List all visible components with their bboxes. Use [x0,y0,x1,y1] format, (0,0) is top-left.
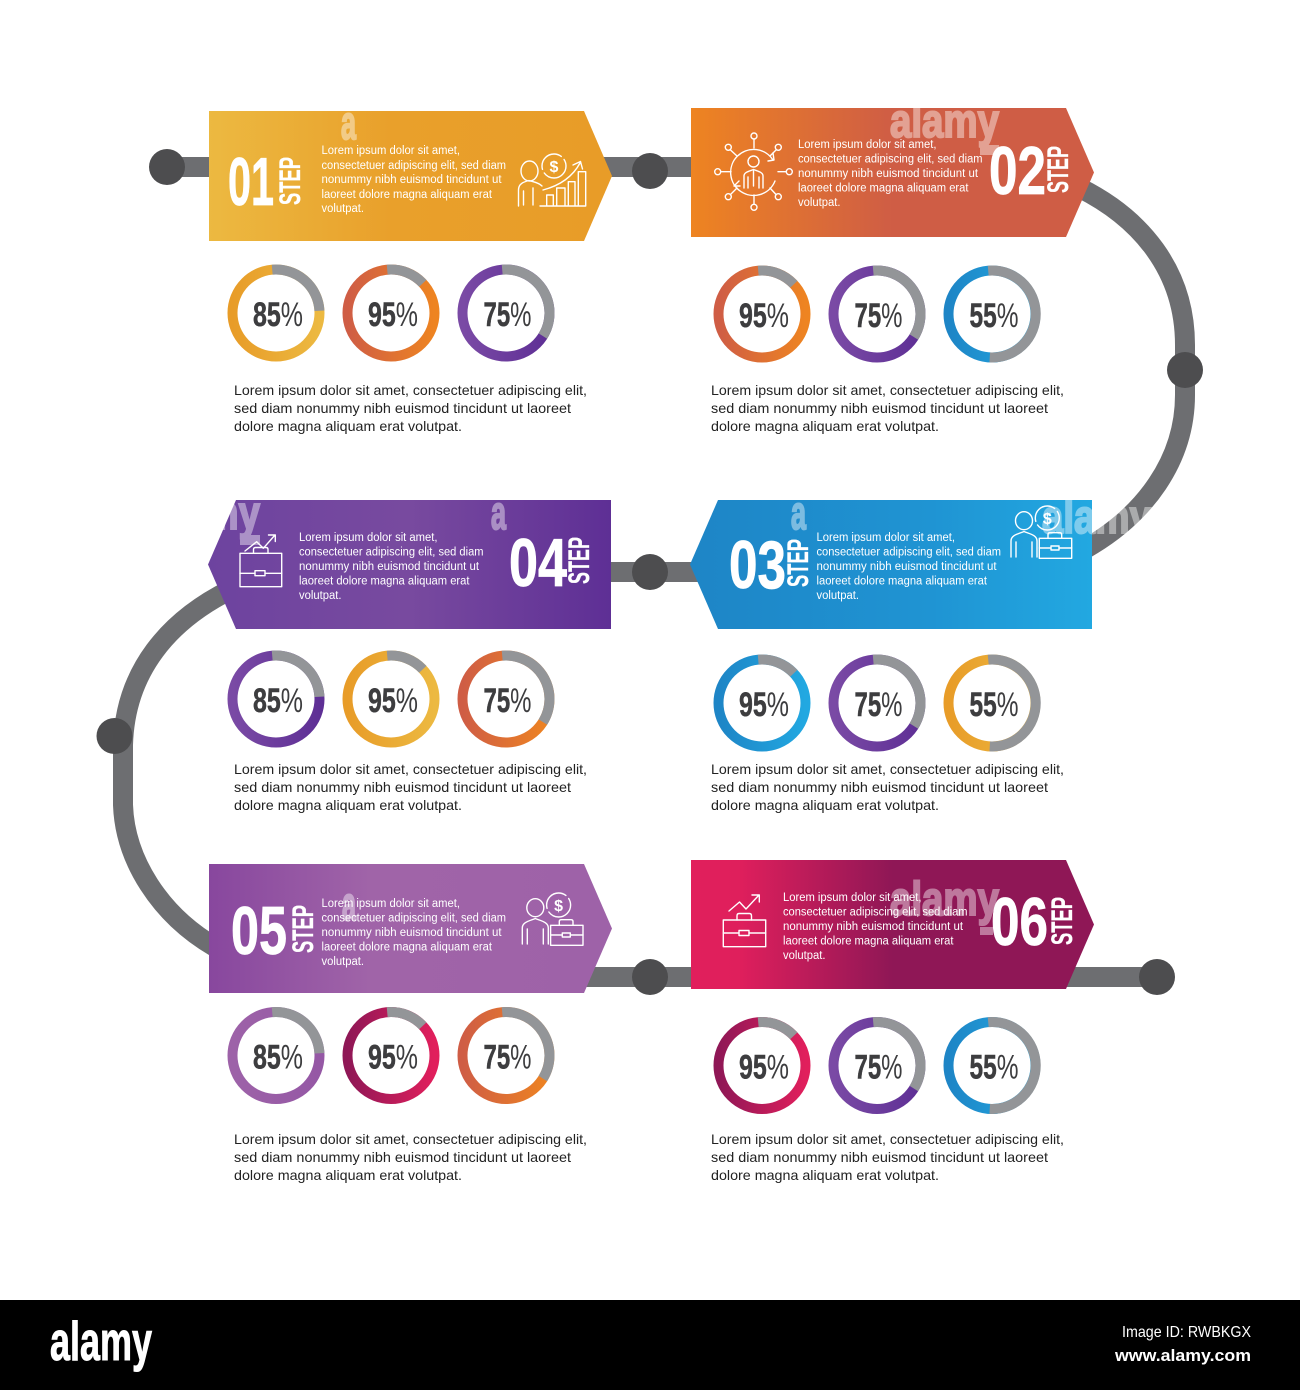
banner: step 6 [691,860,1094,989]
watermarks: a [491,486,506,539]
banner text: consectetuer adipiscing elit, sed diam [816,546,1001,558]
banner text: laoreet dolore magna aliquam erat [798,182,969,194]
banner text: consectetuer adipiscing elit, sed diam [783,906,968,918]
banner text: laoreet dolore magna aliquam erat [816,576,988,588]
banner text [322,145,506,215]
icon: person with briefcase [522,893,583,945]
icon: person with briefcase: $ [554,898,563,915]
icon: person in network [715,133,792,210]
donut: 75%: 75% [854,686,903,724]
banner text: nonummy nibh euismod tincidunt ut [798,168,979,180]
donut: 95% [718,660,806,746]
banner text: consectetuer adipiscing elit, sed diam [798,154,982,166]
body text: sed diam nonummy nibh euismod tincidunt ut laoreet [711,779,1048,795]
banner text [783,892,968,962]
banner text: nonummy nibh euismod tincidunt ut [299,561,480,573]
panel: step 1 [209,111,612,434]
image id: Image ID: RWBKGX [1122,1324,1251,1341]
donut: 75%: 75% [484,682,532,720]
watermarks: alamy [890,94,999,147]
icon: briefcase with arrow [240,535,282,587]
step number 03: 03 [729,527,786,603]
donut: 95% [348,270,434,356]
banner: step 2 [691,108,1094,237]
donut: 85%: 85% [253,296,303,334]
banner: step 5 [209,864,612,993]
banner text: volutpat. [299,590,342,602]
donut: 75% [834,660,920,746]
body text: Lorem ipsum dolor sit amet, consectetuer adipiscing elit, [234,1131,587,1147]
watermarks: alamy [1042,490,1151,543]
timeline nodes [96,149,1203,995]
site url: www.alamy.com [1114,1346,1251,1365]
banner text: nonummy nibh euismod tincidunt ut [783,921,964,933]
donut: 75% [834,270,920,358]
body text: dolore magna aliquam erat volutpat. [234,797,462,813]
donut: 85% [232,656,320,742]
banner text: volutpat. [322,956,364,968]
step number 05: 05 [231,893,287,969]
donut: 55%: 55% [970,297,1018,335]
body text: dolore magna aliquam erat volutpat. [711,1167,939,1183]
donut: 85%: 85% [253,682,303,720]
banner text [322,898,506,968]
step number 04: 04 [509,525,567,601]
body text: Lorem ipsum dolor sit amet, consectetuer adipiscing elit, [234,761,587,777]
donut: 75% [462,656,550,742]
banner text: Lorem ipsum dolor sit amet, [322,898,460,910]
icon: briefcase with arrow [723,895,766,947]
panel: step 3 [690,500,1092,813]
panel: step 5 [209,864,612,1183]
banner text: Lorem ipsum dolor sit amet, [783,892,922,904]
footer bar [0,1300,1300,1390]
banner text: volutpat. [816,590,859,602]
banner text: Lorem ipsum dolor sit amet, [299,532,438,544]
banner text: nonummy nibh euismod tincidunt ut [322,174,502,186]
body text: Lorem ipsum dolor sit amet, consectetuer adipiscing elit, [234,382,587,398]
donut: 55% [948,660,1036,747]
donut: 85%: 85% [253,1038,303,1076]
icon: person with growth chart: $ [550,159,559,176]
donut: 55% [948,270,1036,358]
body text: Lorem ipsum dolor sit amet, consectetuer adipiscing elit, [711,382,1064,398]
panel: step 6 [691,860,1094,1183]
donut: 75% [834,1022,920,1109]
step number 06: 06 [991,884,1048,960]
banner text: volutpat. [783,950,826,962]
body text [234,761,587,813]
banner: step 4 [208,500,611,629]
body text: sed diam nonummy nibh euismod tincidunt ut laoreet [711,400,1048,416]
donut: 95%: 95% [739,686,789,724]
watermarks: a [342,877,356,930]
banner text: Lorem ipsum dolor sit amet, [322,145,460,157]
donut: 95% [348,656,434,742]
watermarks: a [341,96,356,149]
body text: sed diam nonummy nibh euismod tincidunt ut laoreet [234,400,571,416]
banner text: volutpat. [798,197,840,209]
body text [711,761,1064,813]
banner: step 3 [690,500,1092,629]
banner: step 1 [209,111,612,241]
timeline track [123,167,1185,977]
step label: STEP [563,537,596,584]
banner text: laoreet dolore magna aliquam erat [783,936,954,948]
step label: STEP [1046,897,1079,945]
body text [234,382,587,434]
step number 02: 02 [989,133,1046,209]
banner text: consectetuer adipiscing elit, sed diam [322,160,506,172]
banner text [299,532,484,602]
donut: 85% [232,270,320,356]
step number 01: 01 [228,144,274,220]
banner text: consectetuer adipiscing elit, sed diam [322,912,506,924]
body text: sed diam nonummy nibh euismod tincidunt ut laoreet [711,1149,1048,1165]
donut: 95% [718,270,806,358]
panel: step 4 [208,500,611,813]
body text: dolore magna aliquam erat volutpat. [711,418,939,434]
donut: 55%: 55% [970,1048,1018,1086]
donut: 95% [718,1022,806,1109]
donut: 95%: 95% [739,1048,789,1086]
donut: 95%: 95% [368,1038,418,1076]
banner text [816,532,1001,602]
body text: dolore magna aliquam erat volutpat. [711,797,939,813]
banner text: laoreet dolore magna aliquam erat [322,942,493,954]
body text: dolore magna aliquam erat volutpat. [234,418,462,434]
banner text: Lorem ipsum dolor sit amet, [816,532,955,544]
step label: STEP [1042,146,1075,193]
body text: Lorem ipsum dolor sit amet, consectetuer adipiscing elit, [711,1131,1064,1147]
body text [234,1131,587,1183]
donut: 95%: 95% [368,682,418,720]
body text: sed diam nonummy nibh euismod tincidunt ut laoreet [234,779,571,795]
donut: 75%: 75% [484,1038,532,1076]
banner text: laoreet dolore magna aliquam erat [299,576,470,588]
banner text: volutpat. [322,203,364,215]
banner text: nonummy nibh euismod tincidunt ut [322,927,502,939]
donut: 55% [948,1022,1036,1109]
donut: 75% [462,270,550,356]
donut: 75% [462,1012,550,1099]
step label: STEP [782,539,815,587]
icon: person with briefcase: $ [1043,511,1052,528]
donut: 75%: 75% [854,1048,903,1086]
donut: 55%: 55% [970,686,1018,724]
body text [711,1131,1064,1183]
donut: 95% [348,1012,434,1099]
watermarks [151,94,1151,935]
footer logo: alamy [50,1310,152,1372]
banner text: Lorem ipsum dolor sit amet, [798,139,936,151]
banner text: nonummy nibh euismod tincidunt ut [816,561,997,573]
watermarks: a [791,486,806,539]
donut: 95%: 95% [739,297,789,335]
banner text [798,139,982,209]
donut: 75%: 75% [484,296,532,334]
donut: 75%: 75% [854,297,903,335]
donut: 85% [232,1012,320,1099]
step label: STEP [287,905,320,953]
banner text: consectetuer adipiscing elit, sed diam [299,546,484,558]
banner text: laoreet dolore magna aliquam erat [322,189,493,201]
body text: dolore magna aliquam erat volutpat. [234,1167,462,1183]
donut: 95%: 95% [368,296,418,334]
body text: sed diam nonummy nibh euismod tincidunt ut laoreet [234,1149,571,1165]
icon: person with briefcase [1011,506,1072,558]
panel: step 2 [691,108,1094,434]
watermarks: alamy [890,872,999,925]
step label: STEP [274,157,307,205]
icon: person with growth chart [518,154,586,206]
body text [711,382,1064,434]
body text: Lorem ipsum dolor sit amet, consectetuer adipiscing elit, [711,761,1064,777]
watermarks: alamy [151,486,260,539]
